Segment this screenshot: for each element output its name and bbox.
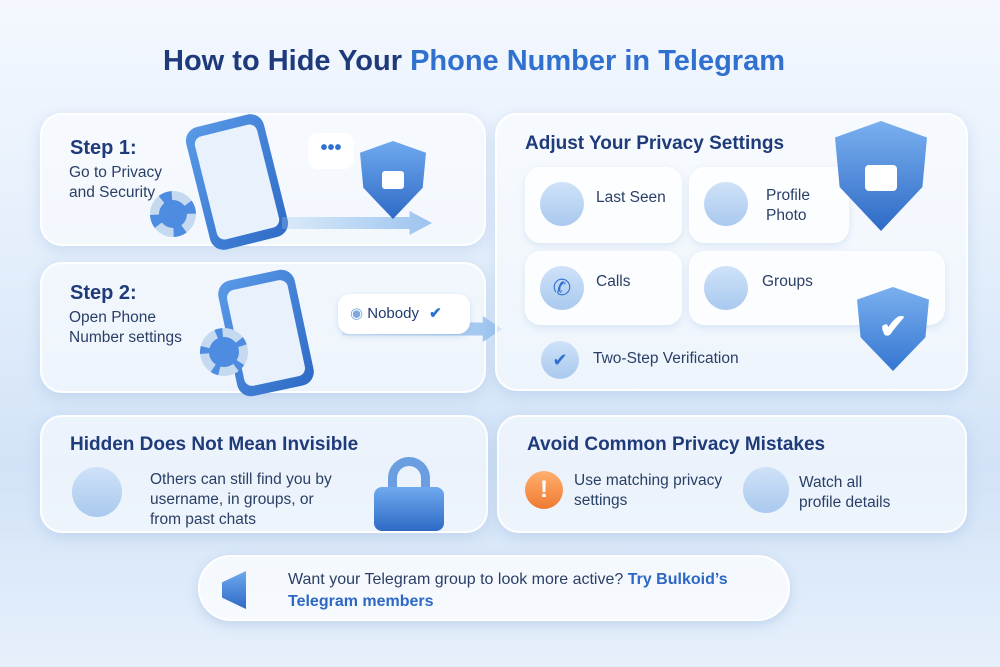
icon: lock shield: [835, 121, 927, 231]
step 2 text: Number settings: [69, 329, 182, 346]
card: calls: ✆: [553, 275, 571, 300]
text: Watch all: [799, 474, 862, 491]
icon: warning: [525, 471, 563, 509]
card: last seen: [525, 167, 682, 243]
text: [799, 474, 890, 511]
panel: avoid mistakes: [497, 415, 967, 533]
icon: shield: [360, 141, 426, 219]
text: from past chats: [150, 511, 256, 528]
callout: nobody: [338, 294, 470, 334]
text: profile details: [799, 494, 890, 511]
step 1 text: and Security: [69, 184, 155, 201]
icon: check shield: ✔: [879, 308, 907, 346]
card: profile photo: Profile: [766, 187, 810, 204]
text: [150, 471, 332, 528]
text: Others can still find you by: [150, 471, 332, 488]
card: calls: Calls: [596, 273, 630, 290]
step 2 text: Open Phone: [69, 309, 156, 326]
step 2 text: [69, 309, 182, 346]
icon: chat bubble: [308, 133, 354, 169]
icon: gear: [150, 191, 196, 237]
callout: CTA: [198, 555, 790, 621]
icon: chat bubble: •••: [320, 137, 342, 159]
text: [574, 472, 722, 509]
title: How to Hide Your Phone Number in Telegram: [163, 45, 785, 77]
CTA text: [288, 571, 728, 610]
CTA text: Want your Telegram group to look more active? Try Bulkoid’s: [288, 571, 728, 588]
icon: gear: [200, 328, 248, 376]
card: profile photo: [689, 167, 849, 243]
avatar icon: [72, 467, 122, 517]
arrow: [282, 211, 432, 235]
card: two-step: [541, 341, 739, 379]
icon: megaphone: [222, 571, 246, 609]
panel: privacy settings: [495, 113, 968, 391]
card: two-step: Two-Step Verification: [593, 350, 739, 367]
panel: step 1: [40, 113, 486, 246]
card: groups: Groups: [762, 273, 813, 290]
icon: check shield: [857, 287, 929, 371]
panel: hidden not invisible: [40, 415, 488, 533]
card: calls: [525, 251, 682, 325]
heading: Hidden Does Not Mean Invisible: [70, 434, 358, 455]
CTA text: Telegram members: [288, 593, 434, 610]
icon: phone: [216, 267, 316, 399]
avatar icon: [743, 467, 789, 513]
icon: phone: [183, 111, 291, 253]
step 1 heading: Step 1:: [70, 137, 137, 159]
step 1 text: [69, 164, 162, 201]
card: last seen: Last Seen: [596, 189, 666, 206]
text: Use matching privacy: [574, 472, 722, 489]
card: profile photo: Photo: [766, 207, 807, 224]
text: settings: [574, 492, 627, 509]
callout: nobody: ◉ Nobody ✔: [350, 305, 442, 322]
heading: Adjust Your Privacy Settings: [525, 133, 784, 154]
text: username, in groups, or: [150, 491, 314, 508]
icon: warning: !: [540, 476, 548, 503]
step 1 text: Go to Privacy: [69, 164, 162, 181]
heading: Avoid Common Privacy Mistakes: [527, 434, 825, 455]
panel: step 2: [40, 262, 486, 393]
icon: padlock: [374, 457, 444, 531]
arrow: [342, 316, 502, 342]
card: two-step: ✔: [552, 350, 568, 370]
card: groups: [689, 251, 945, 325]
step 2 heading: Step 2:: [70, 282, 137, 304]
